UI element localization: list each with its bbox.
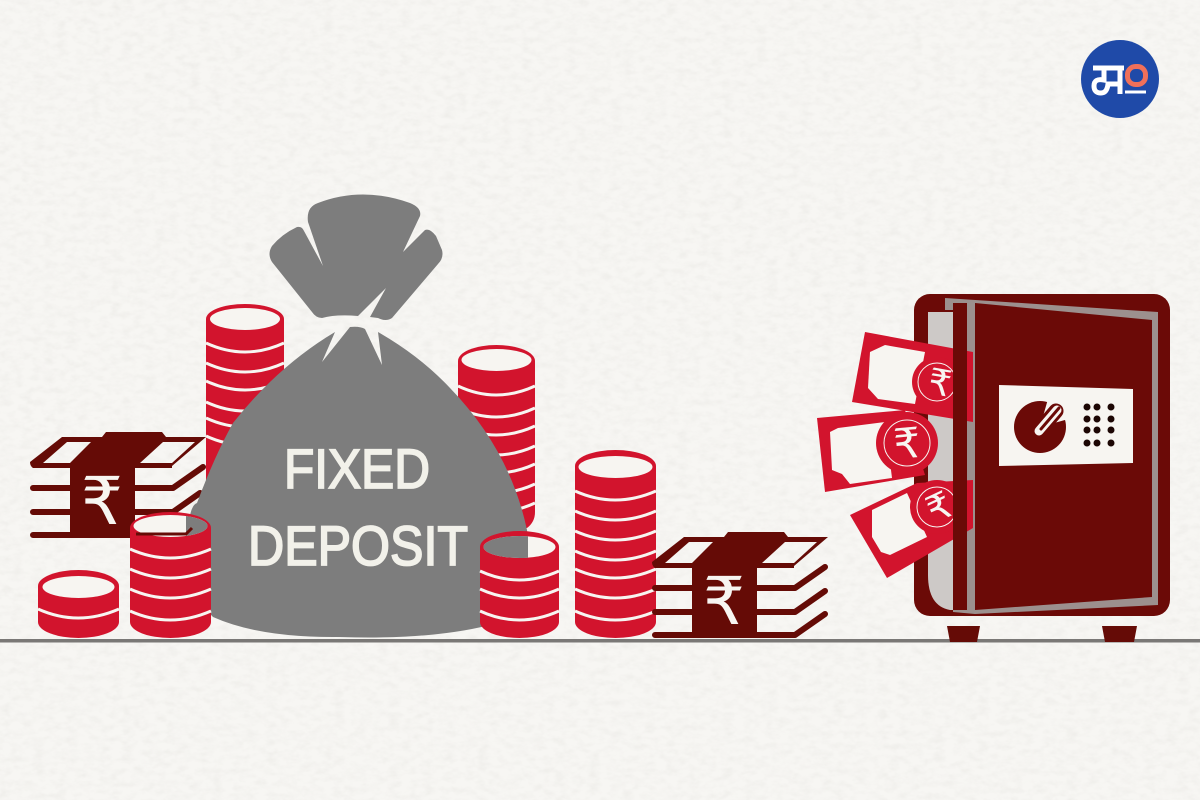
bag label (248, 437, 468, 577)
coin stack: tall behind bag left (206, 304, 284, 480)
keypad panel (999, 385, 1133, 466)
note: top: ₹ (925, 361, 955, 406)
bag body (188, 327, 528, 638)
bag label: DEPOSIT (248, 514, 468, 577)
note: bottom: ₹ (919, 483, 959, 532)
door frame (945, 298, 1158, 614)
coin stack: front of bag right (480, 531, 559, 638)
safe door (953, 303, 1152, 610)
bag label: FIXED (284, 437, 430, 500)
bank notes coming out of safe (817, 332, 973, 578)
note: bottom (850, 480, 973, 578)
safe (817, 294, 1170, 642)
coin stack: tall behind bag right (458, 345, 535, 528)
coin stack: front of bag left (130, 512, 211, 638)
note: top (852, 332, 973, 422)
keypad buttons (1084, 404, 1114, 446)
banknote bundle: right: ₹ (703, 563, 745, 640)
safe interior (928, 312, 955, 610)
safe body (914, 294, 1170, 616)
coin stack: tallest free-standing (575, 450, 656, 638)
note: middle: ₹ (892, 418, 922, 469)
safe feet (947, 626, 1137, 642)
note: middle (817, 410, 938, 492)
coin stack: small far left (38, 570, 119, 638)
banknote bundle: left (30, 432, 206, 540)
banknote bundle: right (652, 532, 828, 640)
logo badge (1081, 40, 1159, 118)
banknote bundle: left: ₹ (81, 463, 123, 540)
ground line (0, 639, 1200, 642)
dial (1014, 392, 1072, 453)
illustration: fixed deposit scene (0, 40, 1200, 642)
bag knot (270, 194, 442, 320)
money bag (188, 194, 528, 638)
